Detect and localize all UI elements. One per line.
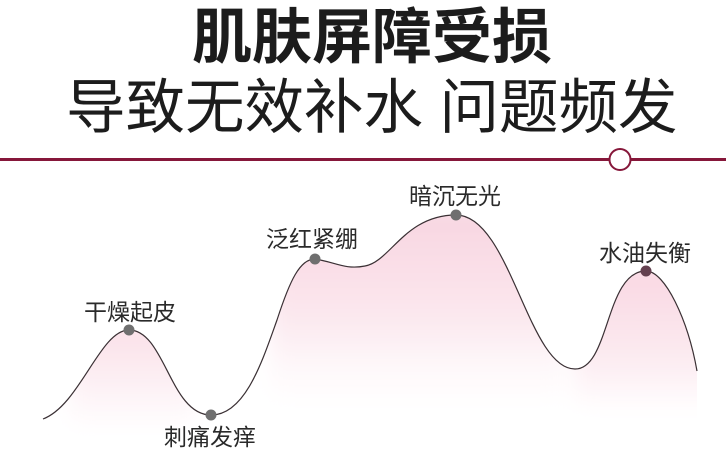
marker: 刺痛发痒 [206, 410, 216, 420]
title: line one: 肌肤屏障受损 [192, 4, 552, 71]
divider line with circle marker [0, 149, 726, 170]
label: 泛红紧绷: 泛红紧绷 [266, 226, 358, 252]
chart: skin problem curve [42, 210, 698, 420]
label: 暗沉无光: 暗沉无光 [409, 183, 501, 209]
marker: 干燥起皮 [124, 324, 134, 336]
marker: 水油失衡 [640, 266, 652, 276]
title: line two: 导致无效补水 问题频发 [66, 74, 678, 141]
area fill under curve [74, 216, 697, 404]
label: 刺痛发痒: 刺痛发痒 [164, 424, 256, 450]
marker: 暗沉无光 [450, 210, 462, 220]
label: 水油失衡: 水油失衡 [599, 240, 691, 266]
marker: 泛红紧绷 [310, 254, 320, 264]
label: 干燥起皮: 干燥起皮 [84, 299, 176, 325]
curve line [43, 215, 697, 419]
